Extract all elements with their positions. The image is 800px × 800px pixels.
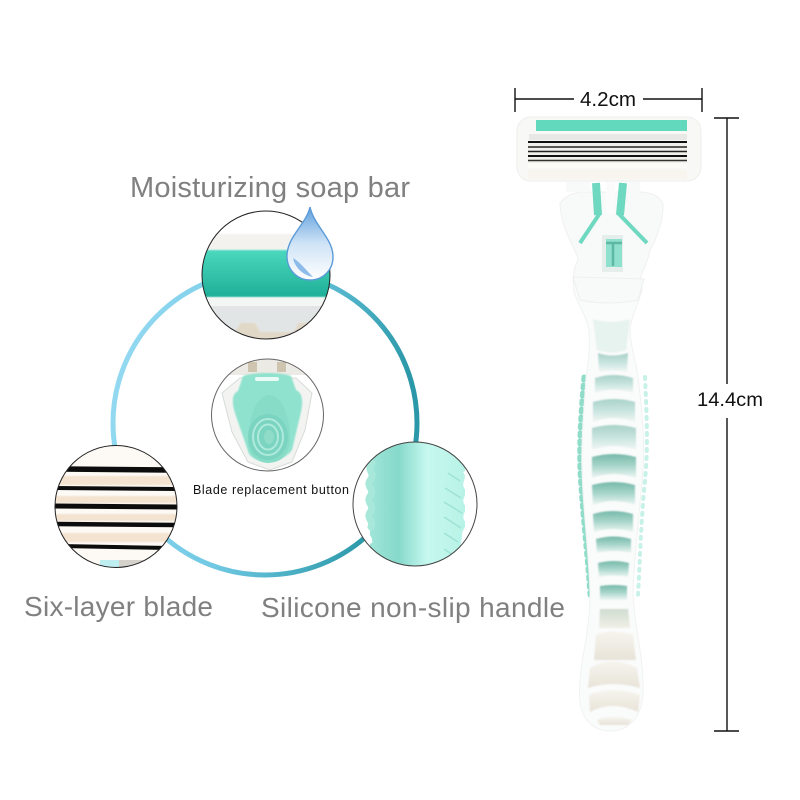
razor illustration — [517, 117, 701, 731]
handle windows — [588, 319, 640, 725]
collar — [573, 277, 644, 303]
panel: silicone handle closeup — [352, 440, 478, 570]
icon: water drop — [287, 207, 333, 280]
heading: moisturizing soap bar: Moisturizing soap bar — [130, 172, 410, 204]
panel: blade replacement button closeup — [212, 359, 324, 471]
label: blade replacement button: Blade replacement button — [193, 483, 349, 497]
dimension: width 4.2cm — [515, 88, 702, 112]
panel: soap bar closeup — [200, 211, 335, 343]
handle serrations — [580, 377, 647, 595]
neck post — [606, 182, 615, 214]
feature ring — [113, 271, 417, 575]
pivot shield — [560, 192, 663, 279]
dimension: height 14.4cm: 14.4cm — [697, 390, 763, 411]
teal pivot arms — [580, 183, 647, 243]
dimension: width 4.2cm: 4.2cm — [580, 89, 636, 111]
release button — [602, 235, 623, 272]
dimension: height 14.4cm — [697, 118, 763, 731]
heading: silicone non-slip handle: Silicone non-slip handle — [261, 592, 565, 623]
infographic — [25, 88, 762, 732]
heading: six-layer blade: Six-layer blade — [24, 591, 213, 622]
handle body — [573, 277, 644, 731]
razor head — [517, 117, 701, 181]
panel: six-layer blade closeup — [55, 444, 177, 569]
